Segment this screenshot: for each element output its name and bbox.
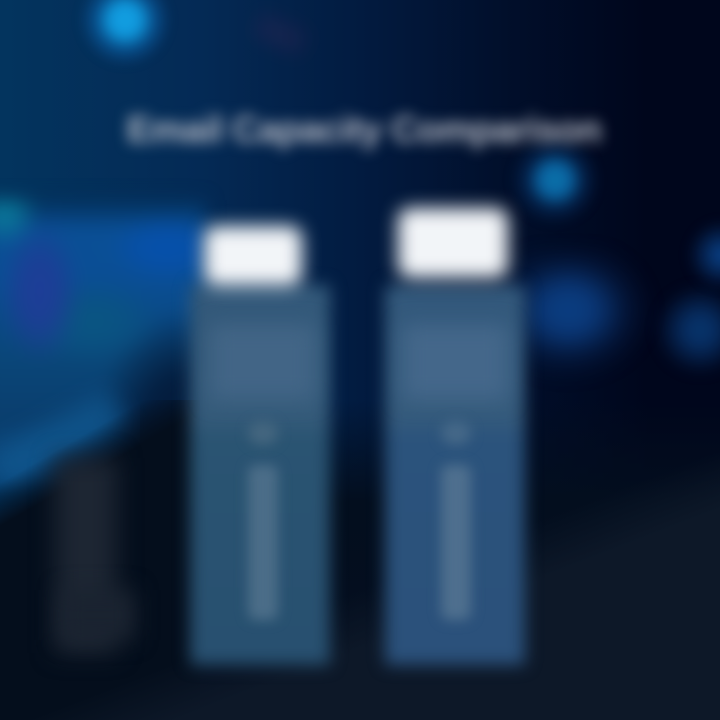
background: right small glow: [510, 135, 600, 225]
background: far right upper glow: [680, 215, 720, 295]
background: lower dark haze: [140, 400, 720, 720]
background: top left glow: [60, 0, 190, 80]
left column body: [190, 285, 330, 665]
background: far right glow: [650, 280, 720, 380]
left dark block foot: [60, 590, 135, 640]
title: Email Capacity Comparison: [127, 109, 601, 150]
left column text block: [210, 325, 315, 400]
background: right blue haze: [490, 250, 660, 420]
right column bar: [441, 465, 471, 620]
panel: left column: [180, 277, 340, 674]
left white header: [204, 226, 302, 286]
background: lower left dark wedge: [0, 400, 200, 720]
background: screen lower diagonal band: [0, 392, 127, 488]
right column icon: [441, 421, 471, 445]
background: faint pink streak: [252, 13, 308, 55]
left column bar: [248, 465, 278, 620]
left dark block: [55, 458, 117, 653]
panel: right column: [374, 276, 536, 674]
right column body: [385, 285, 525, 665]
right column text block: [403, 325, 508, 400]
left column icon: [248, 421, 278, 445]
right white header: [398, 208, 508, 278]
background: left blue screen: [0, 200, 205, 485]
